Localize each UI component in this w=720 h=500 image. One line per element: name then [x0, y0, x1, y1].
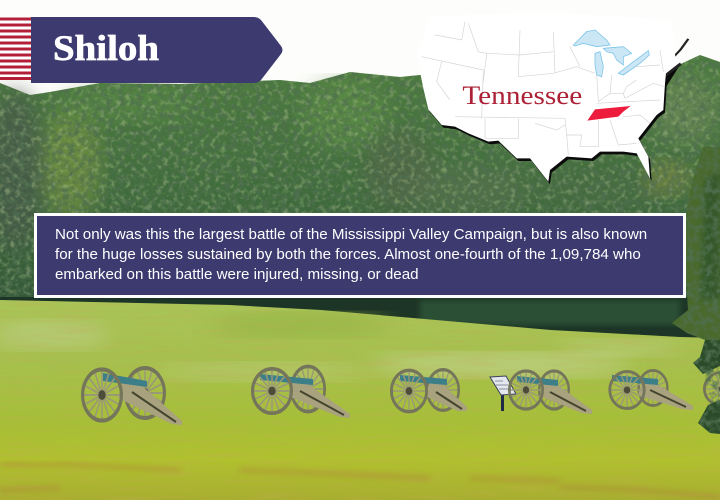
map land	[417, 12, 680, 182]
flag stripes	[0, 17, 31, 80]
description panel	[34, 213, 686, 298]
description panel: embarked on this battle were injured, missing, or dead	[55, 266, 419, 283]
description panel: for the huge losses sustained by both the forces. Almost one-fourth of the 1,09,784 who	[55, 246, 641, 263]
cannon 1	[83, 368, 182, 425]
map shadow: northeast coast	[617, 38, 689, 76]
information sign	[490, 376, 516, 411]
US map with Tennessee highlighted	[417, 12, 689, 184]
photo background: tree line	[0, 55, 720, 345]
map shadow	[418, 29, 678, 184]
cannon 3	[391, 370, 467, 412]
photo background: sky	[0, 0, 720, 120]
photo background: grass field	[0, 300, 720, 500]
partial cannon wheel at right edge	[704, 372, 720, 406]
state borders	[422, 22, 665, 155]
heading: Shiloh	[53, 28, 159, 68]
Tennessee	[587, 106, 631, 121]
description panel: Not only was this the largest battle of the Mississippi Valley Campaign, but is also known	[55, 226, 647, 243]
Great Lakes	[573, 30, 649, 77]
cannon 5	[610, 370, 693, 410]
foreground tree at right edge	[670, 147, 720, 437]
cannon 4	[509, 371, 592, 414]
state label: Tennessee	[462, 80, 582, 110]
banner shape	[31, 17, 282, 83]
cannon 2	[253, 366, 350, 418]
title banner	[0, 17, 282, 83]
